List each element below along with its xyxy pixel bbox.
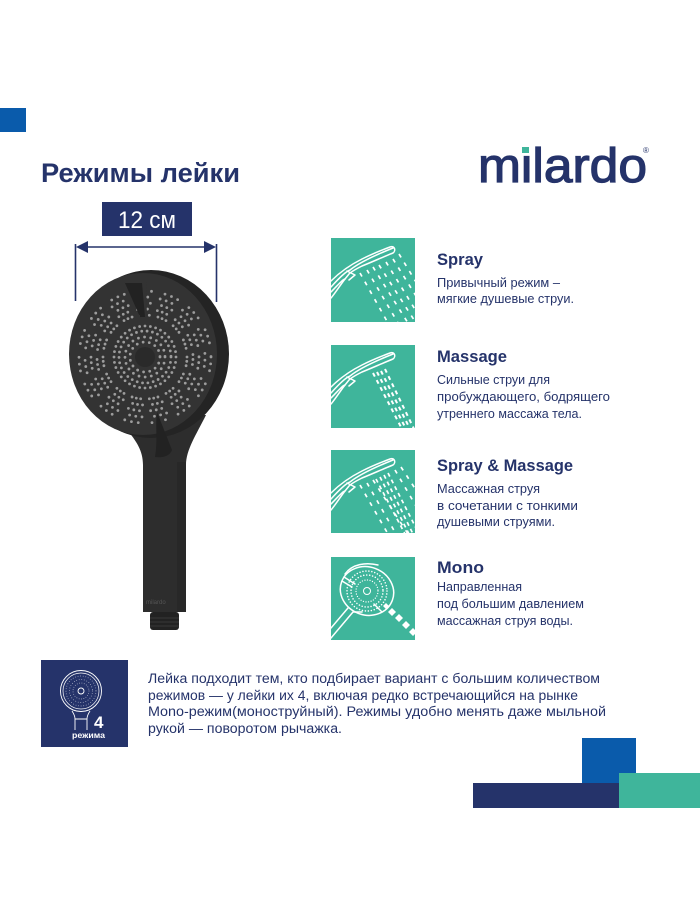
engraved brand: milardo <box>146 600 166 606</box>
description paragraph: Лейка подходит тем, кто подбирает вариант с большим количеством <box>148 671 600 686</box>
description: утреннего массажа тела. <box>437 407 582 421</box>
logo: milardo: milardo <box>478 140 647 193</box>
icon: spray <box>331 238 416 323</box>
mode: Spray <box>331 238 574 323</box>
description <box>437 482 578 529</box>
heading: Mono <box>437 558 484 577</box>
description paragraph: режимов — у лейки их 4, включая редко встречающийся на рынке <box>148 688 578 703</box>
nozzle dots <box>79 291 211 423</box>
description: Сильные струи для <box>437 373 550 387</box>
mode: Mono <box>331 557 584 640</box>
icon: spray and massage <box>331 450 416 534</box>
description: массажная струя воды. <box>437 614 573 628</box>
icon: massage <box>331 345 415 429</box>
description: мягкие душевые струи. <box>437 292 574 306</box>
description <box>437 276 574 306</box>
logo: milardo: ® <box>643 146 649 155</box>
heading: Massage <box>437 347 507 366</box>
bottom notch <box>155 412 172 457</box>
description: пробуждающего, бодрящего <box>437 390 610 404</box>
description: Массажная струя <box>437 482 540 496</box>
title: Режимы лейки <box>41 158 240 188</box>
heading: Spray <box>437 250 484 269</box>
mode: Spray & Massage <box>331 450 578 534</box>
description <box>437 580 584 628</box>
corner accent: blue square <box>0 108 26 132</box>
description paragraph: рукой — поворотом рычажка. <box>148 721 342 736</box>
size label: 12 см <box>102 202 192 236</box>
head face <box>69 273 217 435</box>
central disc <box>135 347 155 367</box>
icon: shower head outline <box>60 670 102 730</box>
dimension arrow <box>76 241 216 302</box>
head rim <box>73 270 229 438</box>
handle <box>116 415 206 612</box>
mode: Massage <box>331 345 610 429</box>
icon: mono <box>331 557 417 640</box>
description: Привычный режим – <box>437 276 560 290</box>
number: 4 <box>94 713 104 732</box>
top notch <box>124 281 147 318</box>
size label: 12 см: 12 см <box>118 207 176 234</box>
shower head product image <box>69 270 229 630</box>
description: Направленная <box>437 580 522 594</box>
heading: Spray & Massage <box>437 456 573 475</box>
description paragraph: Mono-режим(моноструйный). Режимы удобно менять даже мыльной <box>148 704 606 719</box>
description: в сочетании с тонкими <box>437 499 578 513</box>
description: под большим давлением <box>437 597 584 611</box>
bottom decoration blocks <box>473 738 700 808</box>
badge: 4 modes <box>41 660 128 747</box>
label: режима <box>72 730 105 740</box>
description paragraph <box>148 671 606 736</box>
description: душевыми струями. <box>437 515 555 529</box>
description <box>437 373 610 421</box>
connector <box>150 612 179 630</box>
